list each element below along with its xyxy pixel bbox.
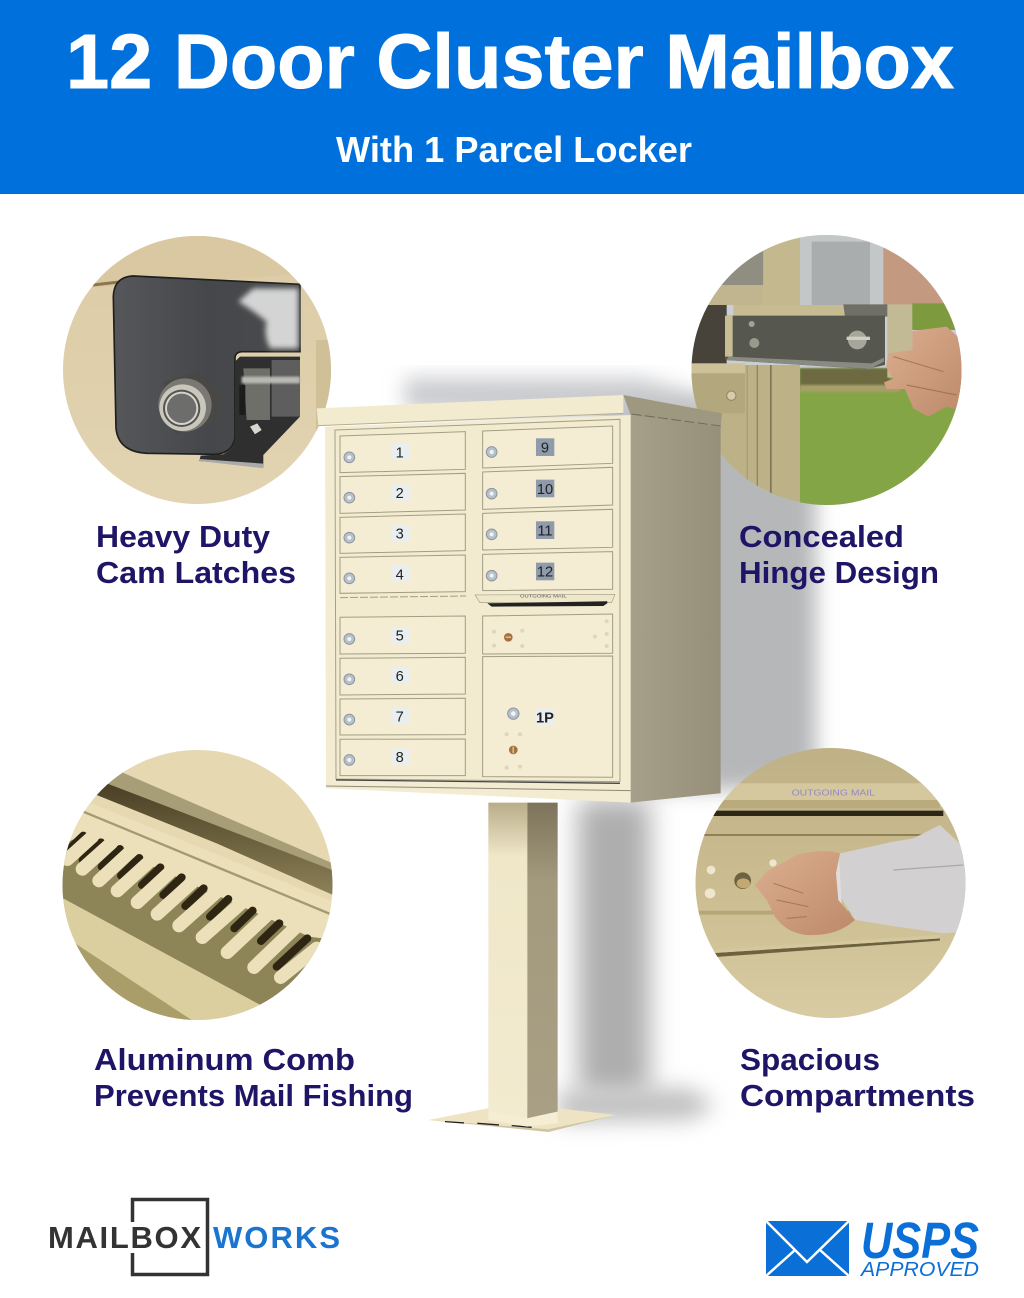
roof side [623,395,722,427]
label: aluminum comb: Aluminum Comb [94,1042,355,1077]
right column doors [483,426,613,777]
photo: spacious compartments: OUTGOING MAIL [792,788,876,797]
header banner [0,0,1024,194]
door numbers: 3 [396,527,404,543]
door locks [344,447,519,765]
door numbers: 9 [541,440,549,456]
outgoing mail slot: OUTGOING MAIL [520,593,567,598]
carrier locks [504,633,518,754]
cabinet side [631,415,721,803]
door numbers: 5 [396,628,404,644]
strip above the slots [70,807,332,938]
logo: usps approved [766,1212,979,1281]
rivets [492,619,609,770]
door numbers: 12 [537,565,553,581]
subtitle: With 1 Parcel Locker [336,129,692,170]
hinge bracket [690,305,727,363]
latch cam [199,357,300,467]
upper strip and shadow band [103,770,337,877]
outgoing mail slot [475,593,615,607]
beige post [690,365,800,508]
outgoing mail plate [713,783,947,807]
label: heavy duty cam latches [96,519,296,590]
photo: aluminum comb [57,745,340,1027]
fist [755,851,855,935]
icon: envelope [766,1221,849,1276]
door numbers: 7 [396,709,404,725]
title: 12 Door Cluster Mailbox [66,19,954,105]
lower olive band [62,839,322,1005]
door numbers: 6 [396,669,404,685]
comb fingers [67,837,317,977]
photo: heavy duty cam latch [60,230,340,510]
logo: mailbox works [48,1200,340,1274]
label: aluminum comb: Prevents Mail Fishing [94,1078,413,1113]
sleeve [835,825,967,933]
rivets and key lock [707,866,715,874]
label: heavy duty cam latches: Heavy Duty [96,519,271,554]
roof front [317,395,623,426]
lawn [800,368,967,508]
comb slots [68,836,307,967]
label: heavy duty cam latches: Cam Latches [96,555,296,590]
cabinet front [325,415,631,803]
door numbers: 2 [396,486,404,502]
logo: mailbox works: WORKS [213,1220,340,1255]
label: concealed hinge design: Hinge Design [739,555,939,590]
label: spacious compartments [740,1042,975,1113]
logo: usps approved: APPROVED [860,1259,979,1281]
lock nut [158,373,200,433]
number plates [392,444,554,765]
photo: spacious compartments [690,745,970,1025]
door numbers: 8 [396,750,404,766]
door numbers: 10 [537,482,553,498]
latch plate [113,276,300,454]
photo: concealed hinge [688,230,968,510]
label: spacious compartments: Compartments [740,1078,975,1113]
post front [488,803,527,1118]
base plate [428,1108,616,1132]
label: concealed hinge design: Concealed [739,519,904,554]
label: concealed hinge design [739,519,939,590]
door numbers: 1 [396,445,404,461]
logo: usps approved: USPS [861,1212,979,1269]
mailbox drop shadow [405,378,816,1122]
left column doors [340,432,465,776]
mailbox post [428,803,616,1132]
mailbox cabinet [317,395,722,803]
label: aluminum comb [94,1042,413,1113]
label: spacious compartments: Spacious [740,1042,880,1077]
door numbers: 11 [537,523,553,539]
hand [884,327,963,417]
door numbers: 4 [396,567,404,583]
door numbers [396,440,554,766]
logo: mailbox works: MAILBOX [48,1220,201,1255]
door numbers: 1P [536,710,554,726]
window and brick background [800,232,883,305]
post side [527,803,558,1118]
